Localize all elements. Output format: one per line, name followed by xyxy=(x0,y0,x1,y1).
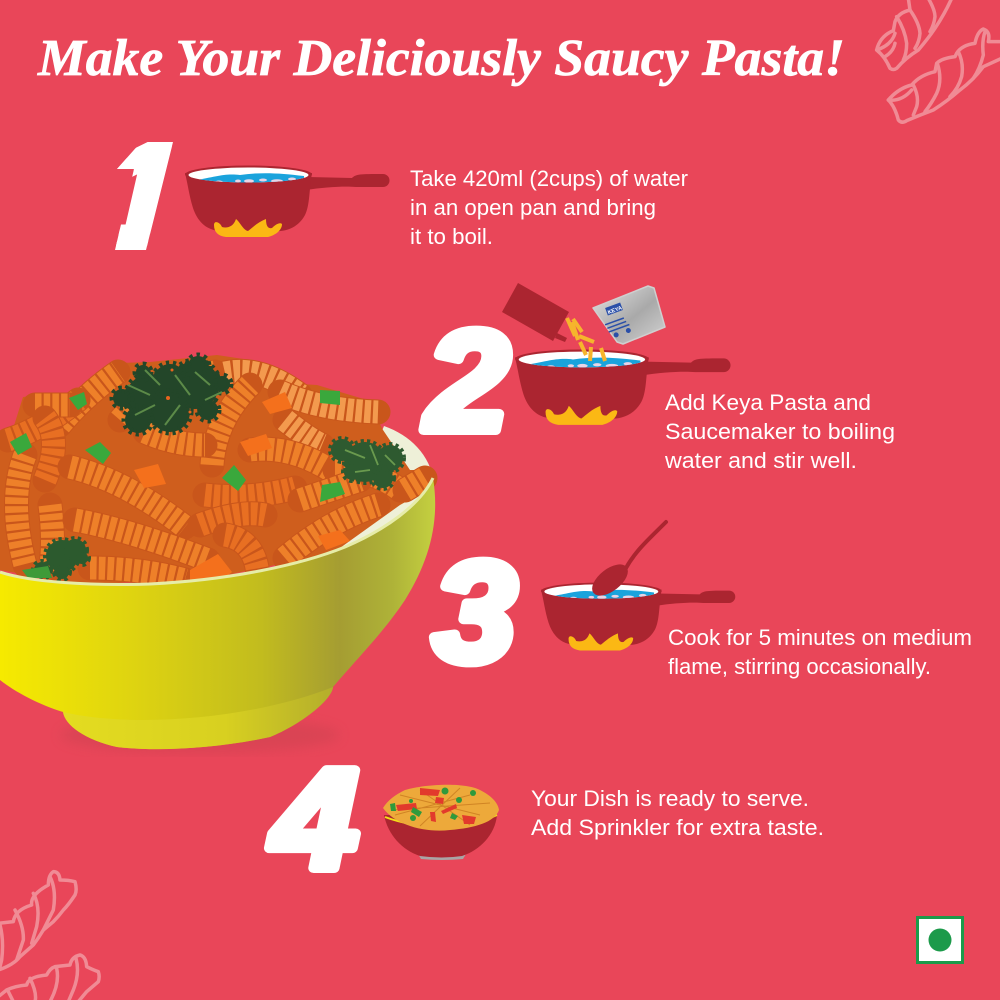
step 1 xyxy=(115,142,688,250)
step 3 text xyxy=(668,625,972,679)
pasta heap xyxy=(0,355,433,585)
decorative pasta outline: top right xyxy=(877,0,1000,122)
parsley: right xyxy=(331,439,403,488)
step 4 text xyxy=(531,786,824,840)
bowl foot xyxy=(63,687,333,749)
icon: pasta pack pouring xyxy=(502,283,605,361)
number 4: 4 xyxy=(269,739,358,899)
icon: vegetarian mark xyxy=(918,918,962,962)
step 3 text: flame, stirring occasionally. xyxy=(668,654,931,679)
icon: pan with spoon xyxy=(541,522,735,650)
vegetable pieces: green xyxy=(10,390,345,502)
parsley: top xyxy=(113,356,230,433)
step 4 xyxy=(269,739,824,899)
step 2 xyxy=(423,283,895,473)
number 3: 3 xyxy=(433,532,516,691)
step 1 text xyxy=(410,166,688,249)
step 2 text: Add Keya Pasta and xyxy=(665,390,871,415)
step 1 text: in an open pan and bring xyxy=(410,195,656,220)
title: Make Your Deliciously Saucy Pasta! xyxy=(37,30,845,87)
step 2 text: water and stir well. xyxy=(664,448,857,473)
icon: boiling pan xyxy=(185,166,390,237)
step 3 xyxy=(433,522,972,691)
bowl inner back rim xyxy=(330,426,434,555)
icon: boiling pan xyxy=(515,349,731,425)
pasta bowl photo xyxy=(0,355,435,753)
icon: saucemaker sachet: KEYA xyxy=(607,305,623,316)
icon: served pasta bowl xyxy=(383,785,499,860)
vegetable pieces: orange xyxy=(134,392,350,580)
parsley: lower left xyxy=(22,539,88,579)
icon: saucemaker sachet xyxy=(593,286,665,344)
bowl rim highlight xyxy=(0,478,433,584)
step 4 text: Add Sprinkler for extra taste. xyxy=(531,815,824,840)
step 1 text: Take 420ml (2cups) of water xyxy=(410,166,688,191)
step 1 text: it to boil. xyxy=(410,224,493,249)
number 2: 2 xyxy=(423,301,509,460)
bowl shadow xyxy=(60,717,340,753)
bowl body xyxy=(0,478,435,749)
step 4 text: Your Dish is ready to serve. xyxy=(531,786,809,811)
number 1: 1 xyxy=(95,115,190,277)
step 3 text: Cook for 5 minutes on medium xyxy=(668,625,972,650)
decorative pasta outline: bottom left xyxy=(0,872,99,1000)
step 2 text xyxy=(664,390,895,473)
step 2 text: Saucemaker to boiling xyxy=(665,419,895,444)
